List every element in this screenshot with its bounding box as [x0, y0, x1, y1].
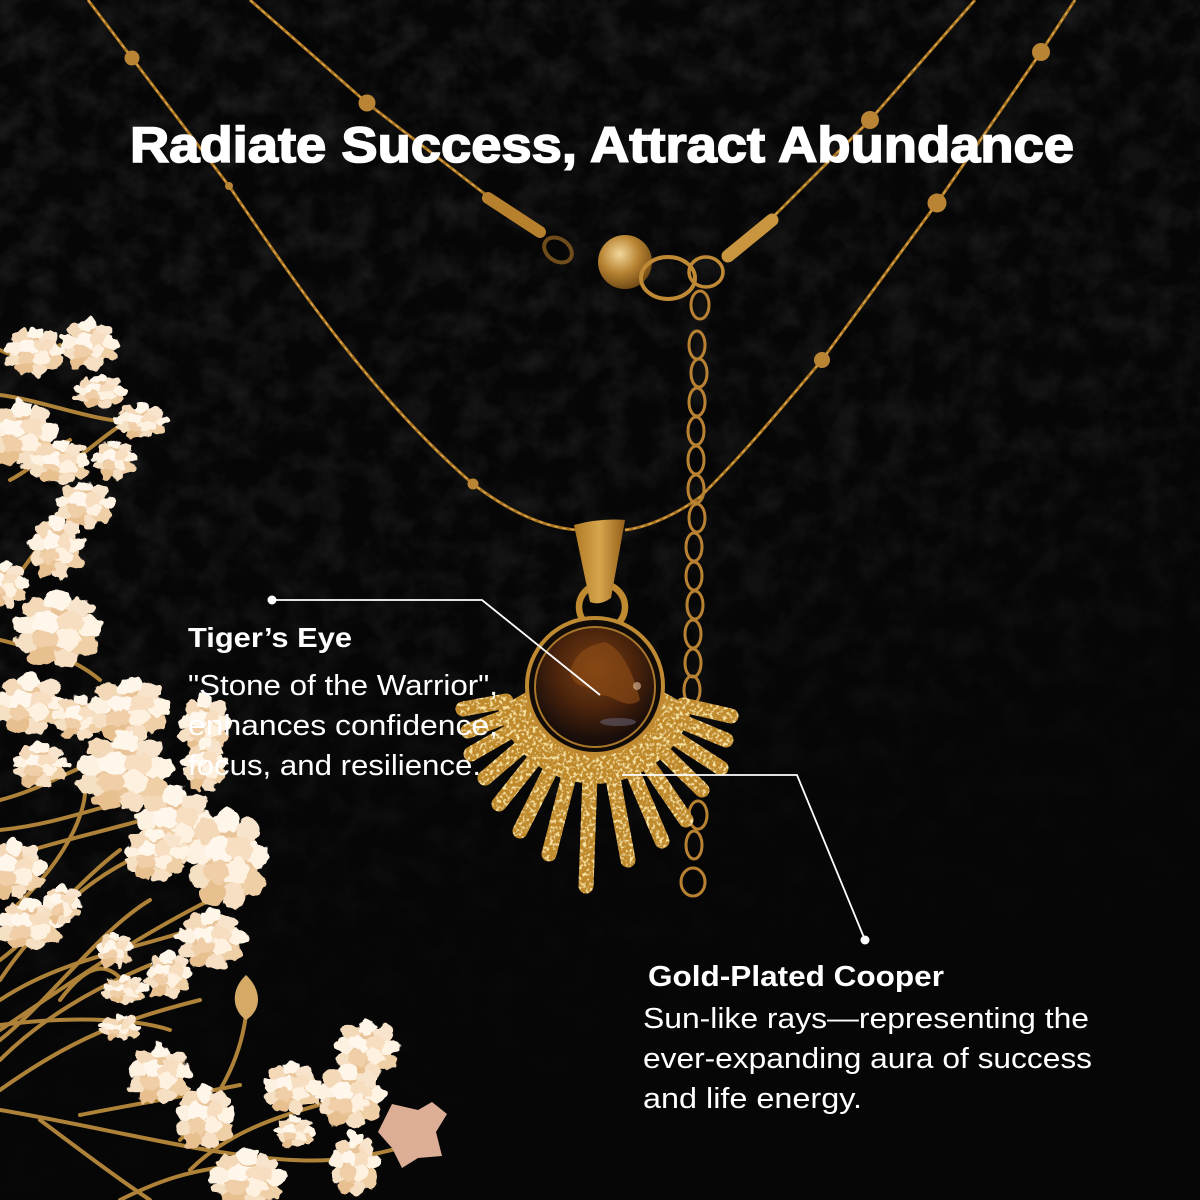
text: Gold-Plated Cooper description: [643, 1003, 1092, 1115]
leader line: Tiger's Eye: [268, 596, 600, 695]
flower bud: [235, 975, 258, 1020]
tiger's eye stone: [535, 627, 655, 747]
text: Gold-Plated Cooper description: Sun-like rays—representing the: [643, 1003, 1089, 1035]
bail ring: [579, 584, 625, 630]
title: Radiate Success, Attract Abundance: [130, 117, 1074, 173]
text: Gold-Plated Cooper description: ever-expanding aura of success: [643, 1043, 1092, 1075]
sun rays: [463, 690, 731, 886]
flower clusters: [0, 319, 400, 1200]
callout: Tiger's Eye: [188, 596, 600, 782]
inner necklace chain with clasp: [250, 0, 975, 299]
left clasp tube: [488, 198, 540, 232]
extender chain: [681, 291, 709, 896]
text: Tiger's Eye description: enhances confidence,: [188, 710, 498, 742]
background: black velvet: [0, 0, 1200, 875]
flower stems: [0, 345, 420, 1200]
text: Tiger's Eye description: "Stone of the Warrior",: [188, 670, 498, 702]
dried flowers bouquet: [0, 319, 447, 1200]
pink flower: [378, 1102, 447, 1168]
stone bezel: [527, 618, 663, 754]
pendant: sun rays with tiger's eye stone: [463, 520, 731, 886]
callout: Gold-Plated Cooper: [622, 775, 1092, 1115]
heading: Gold-Plated Cooper: Gold-Plated Cooper: [648, 961, 944, 993]
right clasp tube: [728, 220, 772, 256]
text: Tiger's Eye description: [188, 670, 498, 782]
text: Gold-Plated Cooper description: and life energy.: [643, 1083, 862, 1115]
leader line: Gold-Plated Cooper: [622, 775, 870, 944]
heading: Tiger's Eye: Tiger’s Eye: [188, 622, 352, 653]
clasp ball: [598, 235, 652, 289]
outer necklace chain with beads: [88, 0, 1075, 530]
bail: [574, 520, 625, 603]
text: Tiger's Eye description: focus, and resilience.: [188, 750, 481, 782]
